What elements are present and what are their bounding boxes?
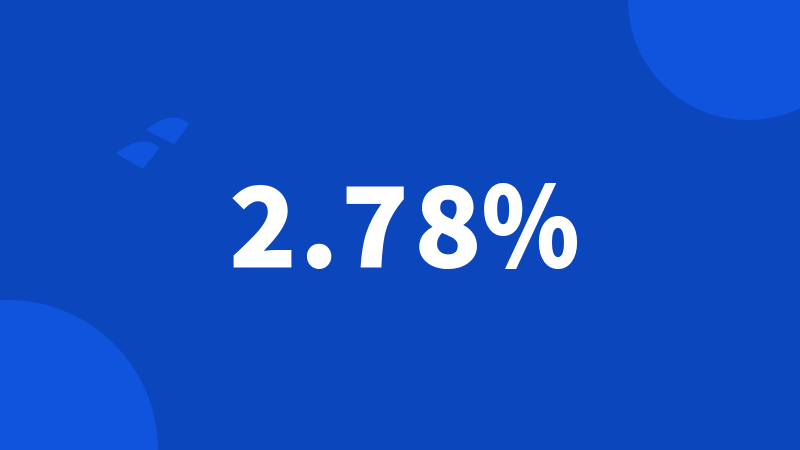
headline figure: 7: [342, 139, 408, 299]
icon: logo wedges: [117, 118, 188, 168]
decorative circle: bottom left: [0, 300, 158, 450]
decorative circle: top right: [628, 0, 800, 120]
headline figure: .: [300, 139, 338, 299]
headline figure: %: [482, 141, 579, 300]
headline figure: 2: [230, 139, 296, 299]
headline figure: [230, 139, 579, 300]
headline figure: 8: [414, 139, 482, 299]
